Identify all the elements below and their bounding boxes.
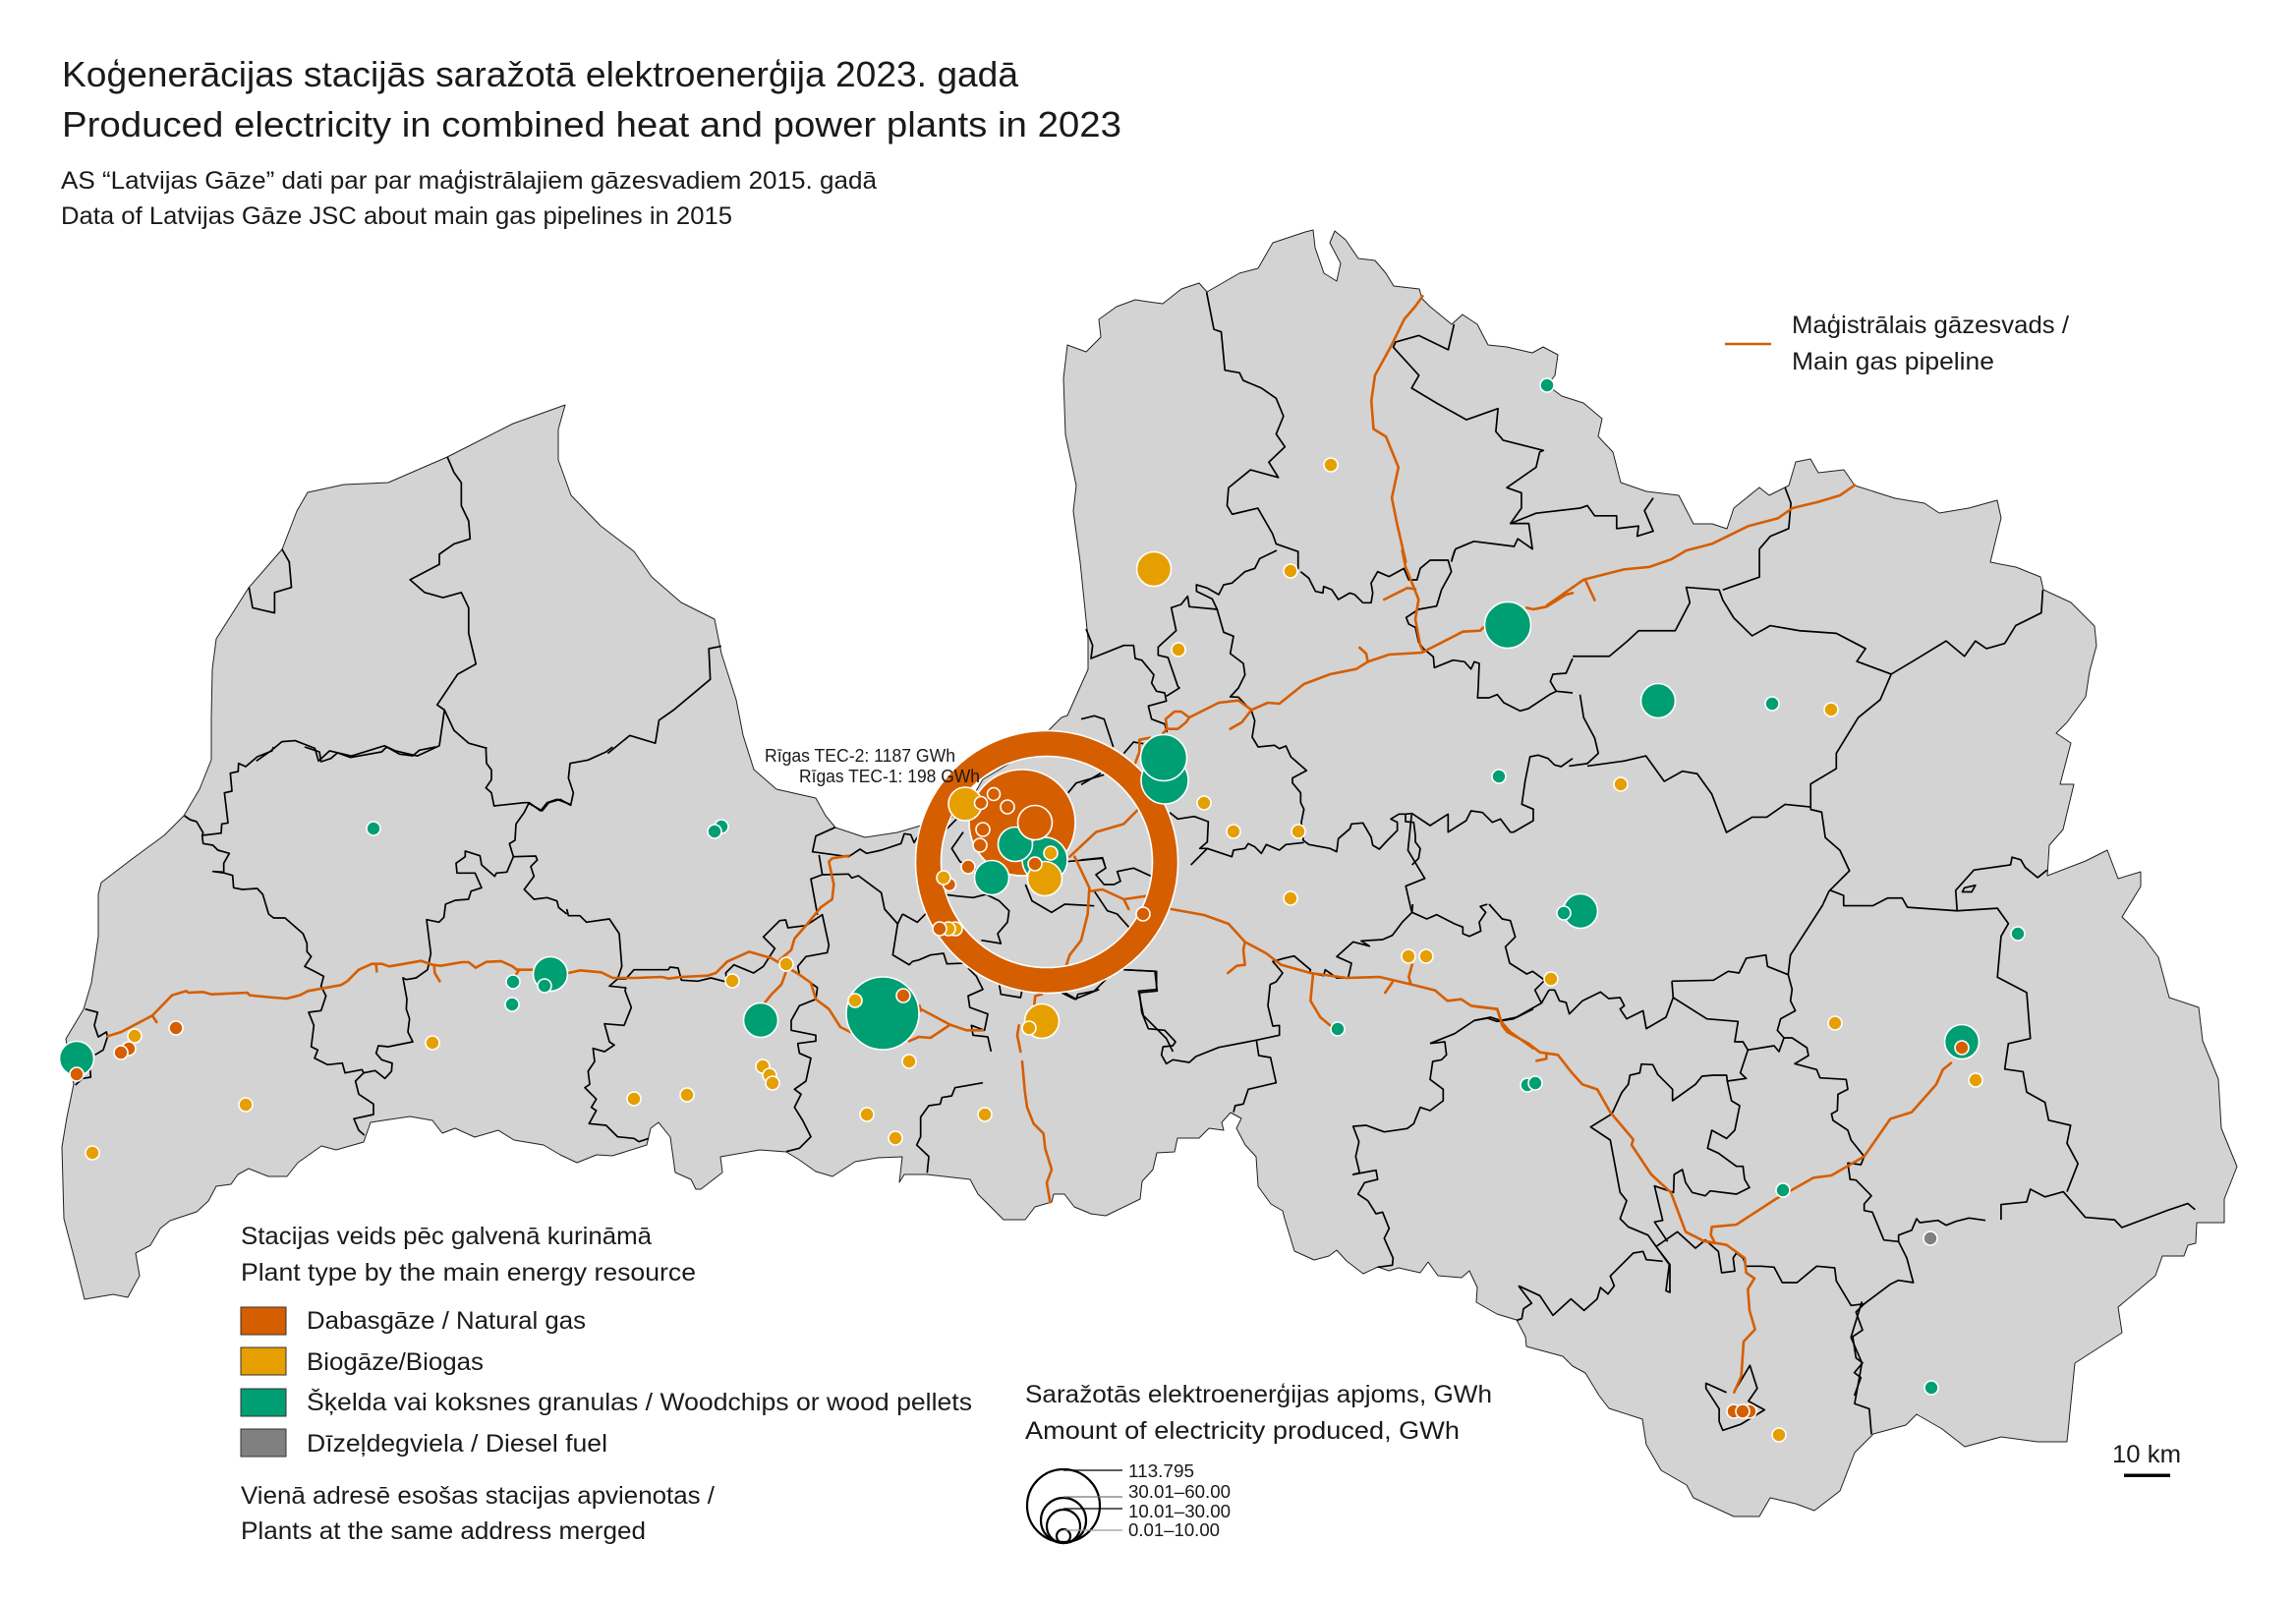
plants: Riga TEC-2 ring (916, 731, 1177, 993)
map: municipality boundaries (76, 292, 2195, 1434)
subtitle: data source note: Data of Latvijas Gāze JSC about main gas pipelines in 2015 (61, 202, 732, 230)
map: main gas pipelines (107, 296, 1951, 1393)
legend: main gas pipeline: Maģistrālais gāzesvads / (1792, 312, 2069, 339)
title: Produced electricity in combined heat and power plants in 2023 (62, 104, 1121, 144)
legend: plant type: Biogāze/Biogas (307, 1348, 484, 1376)
subtitle: data source note: AS “Latvijas Gāze” dati par par maģistrālajiem gāzesvadiem 2015. gadā (61, 167, 877, 195)
subtitle: data source note (61, 167, 877, 230)
legend: plant type: Dabasgāze / Natural gas (307, 1307, 586, 1335)
note: merged plants: Plants at the same address merged (241, 1517, 646, 1545)
map: Latvia land area (62, 230, 2237, 1516)
note: merged plants (241, 1482, 715, 1545)
legend: plant type: Dīzeļdegviela / Diesel fuel (307, 1430, 607, 1458)
legend: circle size (1025, 1381, 1492, 1543)
callout: Riga TEC labels (765, 746, 980, 786)
legend: main gas pipeline (1725, 312, 2069, 375)
plants: proportional circles (59, 378, 2025, 1442)
legend: circle size: 30.01–60.00 (1128, 1482, 1231, 1502)
title: Koģenerācijas stacijās saražotā elektroenerģija 2023. gadā (62, 54, 1019, 94)
legend: plant type: Šķelda vai koksnes granulas / Woodchips or wood pellets (307, 1388, 972, 1416)
legend: plant type: Stacijas veids pēc galvenā kurināmā (241, 1223, 652, 1250)
legend: circle size: 113.795 (1128, 1461, 1194, 1481)
legend: circle size: 0.01–10.00 (1128, 1520, 1220, 1540)
legend: plant type (241, 1223, 972, 1458)
callout: Riga TEC labels: Rīgas TEC-2: 1187 GWh (765, 746, 955, 766)
legend: circle size: Amount of electricity produced, GWh (1025, 1417, 1460, 1445)
legend: plant type: Plant type by the main energy resource (241, 1259, 696, 1287)
callout: Riga TEC labels: Rīgas TEC-1: 198 GWh (799, 767, 980, 786)
title (62, 54, 1121, 144)
legend: circle size: 10.01–30.00 (1128, 1502, 1231, 1521)
legend: main gas pipeline: Main gas pipeline (1792, 348, 1994, 375)
note: merged plants: Vienā adresē esošas stacijas apvienotas / (241, 1482, 715, 1510)
legend: circle size: Saražotās elektroenerģijas apjoms, GWh (1025, 1381, 1492, 1408)
scale bar: 10 km (2112, 1441, 2181, 1468)
